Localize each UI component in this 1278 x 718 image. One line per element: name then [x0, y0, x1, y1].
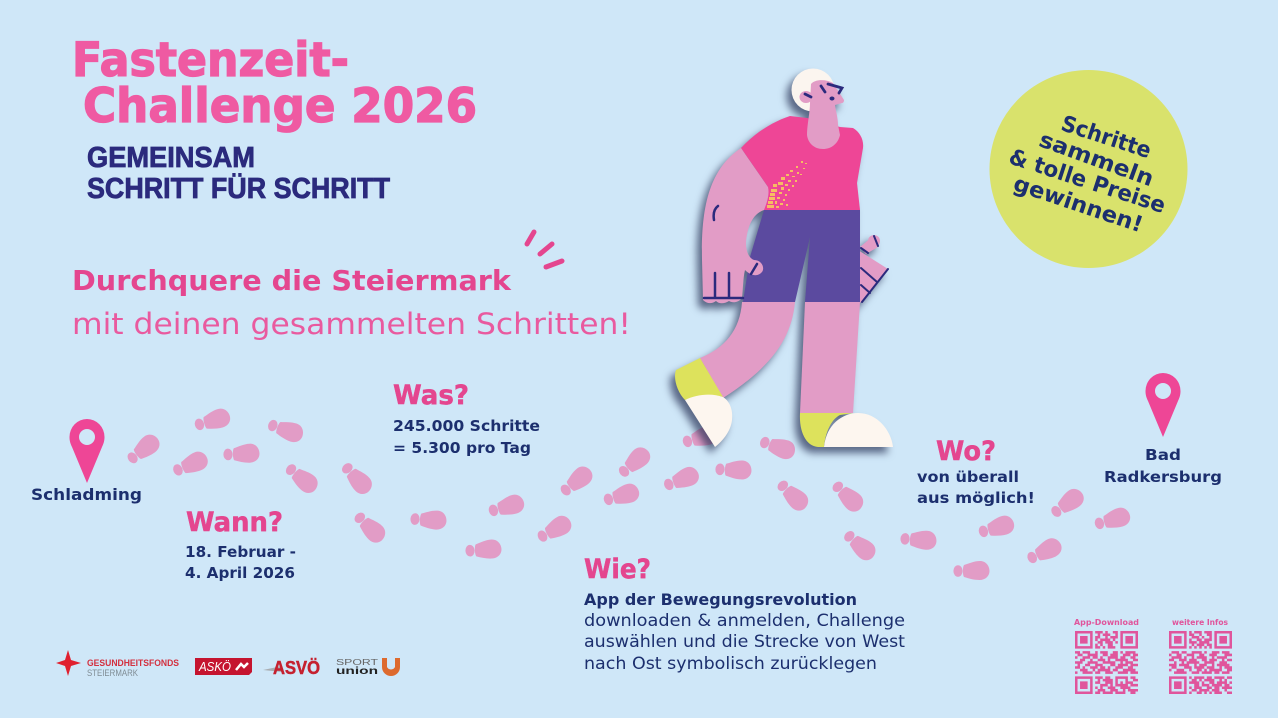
QR: app download: App-Download [1074, 618, 1139, 627]
left arm and hand [702, 148, 769, 303]
headline [72, 264, 631, 341]
footprint trail [123, 407, 1132, 580]
back leg [700, 302, 795, 398]
ear [800, 91, 812, 103]
subtitle [87, 142, 390, 205]
block: Wie: nach Ost symbolisch zurücklegen [584, 654, 877, 673]
icon: finish pin [1146, 373, 1180, 437]
block: Was: 245.000 Schritte [393, 417, 540, 435]
logo: ASKO [195, 658, 252, 675]
walking figure [675, 68, 893, 447]
right hand behind body [858, 235, 888, 303]
QR: weitere Infos [1169, 618, 1232, 693]
block: Wann: Wann? [186, 507, 283, 538]
title [72, 33, 477, 134]
finish label: Bad [1145, 446, 1181, 464]
facial features [805, 84, 842, 97]
logo: Sport Union: union [336, 666, 378, 677]
headline: mit deinen gesammelten Schritten! [72, 307, 631, 341]
block: Wo: von überall [917, 468, 1019, 486]
finish label: Radkersburg [1104, 468, 1222, 486]
block: Wie: Wie? [584, 554, 651, 585]
hair [792, 68, 834, 112]
back sock [675, 358, 723, 400]
block: Wie: App der Bewegungsrevolution [584, 590, 857, 609]
front leg [800, 302, 860, 413]
logo: Gesundheitsfonds [56, 650, 179, 679]
shorts [743, 210, 860, 302]
title: Challenge 2026 [83, 79, 477, 134]
arm details [704, 206, 757, 298]
title: Fastenzeit- [72, 33, 349, 88]
block: Wann: 18. Februar - [185, 543, 296, 561]
front sock [800, 413, 853, 447]
headline: Durchquere die Steiermark [72, 264, 512, 297]
block: Was: = 5.300 pro Tag [393, 439, 531, 457]
finish label [1104, 446, 1222, 486]
block: Was [393, 380, 540, 457]
QR: app download [1074, 618, 1139, 693]
start label: Schladming [31, 485, 142, 504]
prize badge: sammeln [1036, 128, 1157, 192]
shirt speckles [767, 161, 807, 208]
neck and face [807, 80, 844, 149]
prize badge: gewinnen! [1010, 172, 1146, 238]
back shoe [685, 395, 732, 447]
subtitle: GEMEINSAM [87, 142, 255, 174]
block: Wann [185, 507, 296, 582]
logo: ASVO: ASVÖ [273, 658, 320, 678]
accent dashes [527, 232, 562, 267]
prize badge: Schritte [1058, 112, 1154, 164]
logo: Gesundheitsfonds: GESUNDHEITSFONDS [87, 658, 179, 669]
front shoe [824, 413, 893, 447]
logo: Sport Union [336, 658, 400, 677]
block: Was: Was? [393, 380, 469, 411]
prize badge [990, 70, 1188, 268]
block: Wo: Wo? [936, 436, 996, 467]
block: Wo [917, 436, 1035, 507]
logo: ASKO: ASKÖ [198, 660, 231, 674]
block: Wie: auswählen und die Strecke von West [584, 632, 906, 651]
block: Wann: 4. April 2026 [185, 564, 295, 582]
subtitle: SCHRITT FÜR SCHRITT [87, 172, 390, 205]
QR: weitere Infos: weitere Infos [1172, 618, 1229, 627]
shirt [741, 116, 863, 210]
block: Wie: downloaden & anmelden, Challenge [584, 611, 905, 630]
block: Wie [584, 554, 906, 673]
icon: start pin [70, 419, 104, 483]
block: Wo: aus möglich! [917, 489, 1035, 507]
prize badge: & tolle Preise [1006, 145, 1168, 219]
logo: Sport Union: SPORT [336, 658, 378, 667]
logo: Gesundheitsfonds: STEIERMARK [87, 668, 139, 679]
